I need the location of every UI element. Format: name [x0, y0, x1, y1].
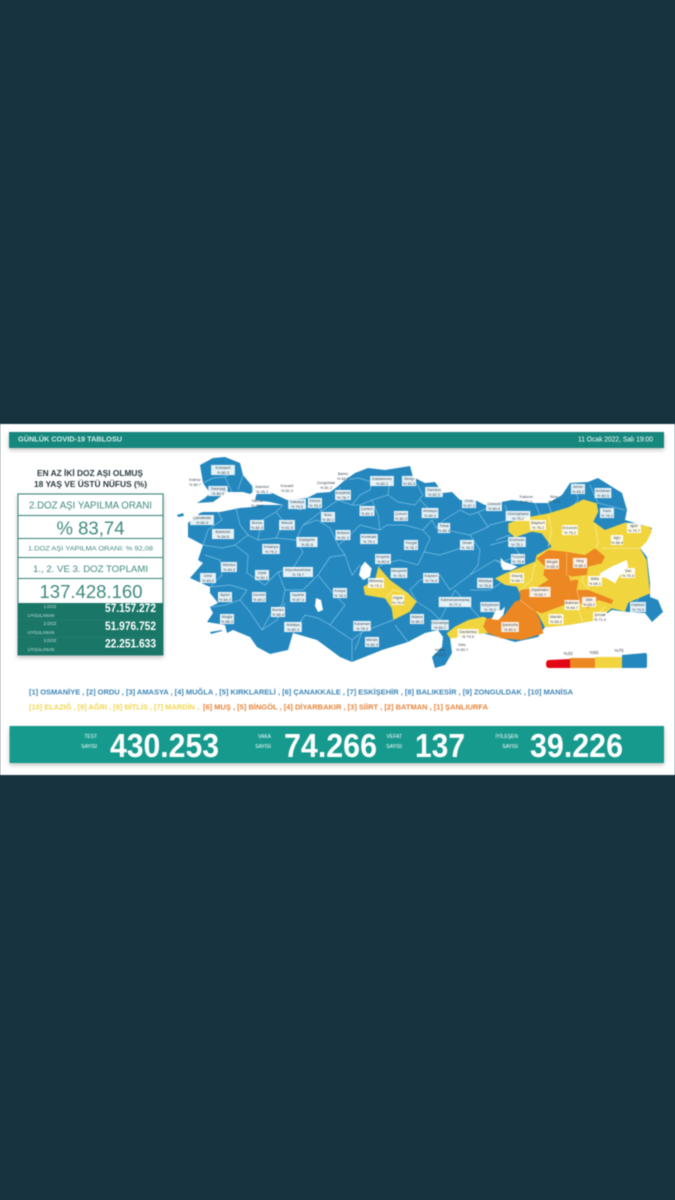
province labels: % 74.4 [392, 600, 405, 605]
dose table: UYGULANAN [28, 630, 54, 635]
province labels: % 80.3 [196, 520, 208, 525]
province labels: Mersin [366, 637, 378, 642]
province labels: % 82.1 [256, 575, 268, 580]
stat: vaka: SAYISI [255, 744, 271, 750]
province labels: Giresun [487, 501, 501, 506]
province labels: % 74.5 [291, 504, 303, 509]
province labels: % 80.2 [424, 513, 436, 518]
yellow province: Gaziantep [447, 617, 488, 638]
province labels: % 87.2 [520, 499, 532, 504]
stat: test: SAYISI [81, 744, 97, 750]
province labels: Samsun [427, 487, 441, 492]
province labels: Adana [411, 614, 423, 619]
province labels: % 78.3 [461, 545, 473, 550]
province labels: % 84.4 [488, 506, 501, 511]
province labels: % 78.3 [334, 593, 346, 598]
province labels: % 60.2 [504, 627, 516, 632]
ranking list: yellow: [10] ELAZIĞ , [9] AĞRI , [8] BİTLİS , [7] MARDİN , [29, 702, 199, 712]
province labels: % 63.7 [534, 592, 546, 597]
province labels: % 68.4 [611, 540, 624, 545]
province labels: % 80.9 [212, 491, 224, 496]
province labels: % 69.7 [456, 647, 468, 652]
map legend [546, 648, 647, 668]
map legend: %65 [589, 650, 599, 655]
province labels: % 82.1 [376, 481, 388, 486]
province labels: Eskişehir [299, 537, 316, 542]
province labels: % 82.9 [428, 492, 440, 497]
province labels: % 78.7 [337, 495, 349, 500]
stat: vaka: VAKA [258, 734, 272, 740]
province labels: % 81.5 [281, 525, 293, 530]
province labels: % 75.1 [511, 542, 523, 547]
province labels: Hatay [435, 647, 445, 652]
left heading: EN AZ İKİ DOZ AŞI OLMUŞ [37, 468, 144, 478]
province labels: Yalova [251, 498, 264, 503]
province labels: % 80.3 [395, 516, 407, 521]
province labels: Denizli [253, 592, 265, 597]
province labels: % 69.2 [550, 619, 562, 624]
lakes and reservoirs [359, 558, 628, 620]
province labels: Kahramanmaraş [441, 597, 469, 602]
header bar: 11 Ocak 2022, Salı 19:00 [578, 436, 653, 444]
first dose rate rows: 1., 2. VE 3. DOZ TOPLAMI [33, 564, 148, 575]
province labels: Trabzon [519, 494, 533, 499]
left heading: 18 YAŞ VE ÜSTÜ NÜFUS (%) [34, 479, 147, 489]
map legend: %33 [563, 651, 573, 656]
dose table: UYGULANAN [28, 647, 54, 652]
province labels: Amasya [423, 508, 438, 513]
province labels: % 75.2 [512, 516, 524, 521]
dose table: 51.976.752 [105, 621, 156, 633]
province labels: Kayseri [425, 573, 438, 578]
province labels: Ankara [337, 530, 350, 535]
province labels: % 80.7 [189, 482, 201, 487]
province labels: Bilecik [281, 520, 293, 525]
province labels: % 83.3 [403, 481, 415, 486]
stat: vefat [386, 727, 465, 764]
province labels: % 71.9 [594, 617, 606, 622]
province labels: Nevşehir [391, 568, 407, 573]
ranking list: orange: [6] MUŞ , [5] BİNGÖL , [4] DİYARBAKIR , [3] SİİRT , [2] BATMAN , [1] ŞANLIURFA [203, 702, 489, 712]
province labels: % 80.3 [251, 525, 263, 530]
province labels: % 77.1 [449, 602, 461, 607]
map legend: %75 [614, 648, 624, 653]
province labels: Batman [565, 600, 579, 605]
province labels: Bursa [252, 520, 263, 525]
province labels: Tokat [439, 523, 450, 528]
province labels: % 84.2 [202, 578, 214, 583]
province labels: Elazığ [512, 573, 522, 578]
first dose rate rows [28, 500, 154, 602]
province labels: % 74.3 [622, 573, 634, 578]
province labels: İstanbul [255, 484, 269, 489]
province labels: Afyonkarahisar [285, 567, 312, 572]
province labels [189, 465, 646, 657]
province labels: Edirne [189, 477, 201, 482]
header bar [9, 432, 664, 448]
ranking list: blue: [1] OSMANİYE , [2] ORDU , [3] AMASYA , [4] MUĞLA , [5] KIRKLARELİ , [6] ÇANAKKALE , [7] ESKİŞEHİR , [8] BALIKESİR , [9] ZONGULDAK , [10] MANİSA [29, 688, 574, 696]
coloured regions, lakes (reference-crop coordinates) [359, 499, 652, 640]
province labels: Rize [550, 494, 558, 499]
province labels: Adıyaman [481, 602, 499, 607]
province labels: Çankırı [361, 506, 373, 511]
province labels: % 79.2 [265, 549, 277, 554]
province labels: % 69.1 [589, 581, 601, 586]
dose table [18, 603, 163, 655]
province labels: % 81.1 [361, 511, 373, 516]
left heading [34, 468, 147, 489]
province labels: Malatya [478, 578, 493, 583]
stat: vefat: 137 [415, 727, 465, 764]
province labels: Ağrı [613, 535, 621, 540]
province labels: % 84.2 [219, 597, 231, 602]
province labels: % 75.8 [479, 583, 491, 588]
province labels: Muş [576, 558, 584, 563]
province labels: Bayburt [531, 520, 546, 525]
province labels: Düzce [309, 498, 321, 503]
map of Turkey [177, 457, 663, 668]
province labels: % 76.2 [601, 513, 613, 518]
dose table: 22.251.633 [105, 638, 156, 650]
province labels: % 76.2 [484, 607, 496, 612]
province labels: Sakarya [290, 499, 305, 504]
stat: iyileşen: 39.226 [530, 727, 623, 764]
province labels: % 84.2 [253, 597, 265, 602]
province labels: % 87.1 [463, 503, 475, 508]
province labels: Hakkari [631, 602, 645, 607]
orange borders [520, 552, 580, 610]
stat: test: TEST [84, 734, 97, 740]
province labels: Kocaeli [281, 483, 294, 488]
dose table: UYGULANAN [28, 613, 54, 618]
province labels: Gaziantep [459, 629, 477, 634]
province labels: % 81.0 [281, 488, 294, 493]
province labels: Şanlıurfa [502, 622, 519, 627]
province labels: Kars [603, 508, 611, 513]
province labels: Sivas [462, 540, 472, 545]
province labels: % 79.1 [363, 539, 375, 544]
stat: vefat: VEFAT [387, 734, 402, 740]
Beyşehir lake [315, 598, 323, 612]
province labels: Balıkesir [216, 529, 231, 534]
province labels: % 80.3 [438, 528, 450, 533]
province labels: Sinop [404, 476, 414, 481]
province labels: % 84.3 [223, 567, 235, 572]
province labels: % 84.6 [217, 534, 229, 539]
province labels: Bitlis [591, 576, 599, 581]
province labels: Gümüşhane [507, 511, 529, 516]
province labels: Niğde [393, 595, 403, 600]
province labels: Aksaray [369, 578, 383, 583]
province labels: % 81.3 [337, 535, 349, 540]
province labels: Ardahan [596, 488, 610, 493]
province labels: Osmaniye [431, 620, 449, 625]
province labels: % 75.4 [548, 499, 561, 504]
stat: iyileşen: SAYISI [502, 744, 518, 750]
province labels: Karaman [354, 621, 370, 626]
province labels: % 64.7 [566, 605, 578, 610]
province labels: Konya [334, 588, 346, 593]
province labels: Manisa [223, 562, 236, 567]
province labels: Aydın [220, 592, 230, 597]
province labels: Artvin [573, 484, 583, 489]
province labels: Iğdır [630, 523, 639, 528]
province labels: % 80.8 [377, 559, 389, 564]
province labels: Yozgat [405, 540, 418, 545]
province labels: Çanakkale [193, 515, 211, 520]
first dose rate rows: 1.DOZ AŞI YAPILMA ORANI: % 92,08 [28, 546, 154, 552]
province labels: Kırşehir [376, 554, 390, 559]
province labels: % 84.5 [337, 476, 349, 481]
dose table: 3.DOZ [44, 638, 57, 643]
province labels: % 86.4 [272, 612, 285, 617]
province labels: % 86.3 [221, 619, 233, 624]
province labels: % 74.9 [632, 607, 644, 612]
first dose rate rows: 2.DOZ AŞI YAPILMA ORANI [29, 500, 152, 512]
province labels: Kütahya [264, 544, 279, 549]
province labels: % 70.7 [628, 528, 640, 533]
province labels: % 78.2 [309, 503, 321, 508]
province labels: % 81.2 [320, 485, 332, 490]
white panel [0, 424, 675, 775]
province labels: % 79.8 [512, 559, 524, 564]
province labels: Erzurum [563, 525, 577, 530]
province labels: Zonguldak [317, 480, 335, 485]
province labels: % 78.7 [292, 572, 304, 577]
province labels: % 76.9 [251, 503, 263, 508]
province labels: Ordu [465, 498, 473, 503]
dose table: 1.DOZ [44, 604, 57, 609]
province labels: Kırıkkale [361, 534, 377, 539]
province labels: % 81.8 [301, 542, 313, 547]
province labels: Bartın [338, 471, 348, 476]
province labels: % 80.1 [322, 517, 334, 522]
province labels: % 80.2 [411, 619, 423, 624]
province labels: % 87.3 [292, 597, 304, 602]
province labels: Erzincan [509, 537, 525, 542]
province labels: Karabük [336, 490, 350, 495]
province labels: % 80.3 [366, 642, 378, 647]
yellow province group: Aksaray, Niğde [363, 567, 417, 620]
first dose rate rows: 137.428.160 [40, 581, 142, 602]
province labels: % 83.2 [434, 652, 446, 657]
province labels: % 80.3 [287, 627, 299, 632]
blue provinces base [177, 457, 663, 668]
province labels: % 73.1 [370, 583, 382, 588]
dose table: 57.157.272 [105, 603, 156, 615]
province labels: % 74.4 [425, 578, 438, 583]
stat: iyileşen: İYİLEŞEN [495, 733, 518, 740]
province labels: Tekirdağ [211, 486, 225, 491]
province labels: Kilis [458, 642, 466, 647]
blue province borders [203, 470, 640, 662]
province labels: Kırklareli [215, 465, 231, 470]
province labels: İzmir [204, 573, 213, 578]
province labels: Bolu [324, 512, 332, 517]
province labels: Siirt [586, 597, 593, 602]
province labels: Van [625, 568, 631, 573]
province labels: % 84.7 [434, 625, 446, 630]
province labels: Antalya [287, 622, 300, 627]
province labels: Tunceli [512, 554, 524, 559]
province labels: % 78.7 [405, 545, 417, 550]
province labels: Isparta [292, 592, 305, 597]
province labels: % 78.0 [393, 573, 406, 578]
province labels: Çorum [395, 511, 407, 516]
province labels: % 76.7 [256, 489, 268, 494]
province labels: % 83.2 [572, 489, 584, 494]
stat: vaka: 74.266 [284, 727, 377, 764]
province labels: Diyarbakır [531, 587, 550, 592]
first dose rate rows: % 83,74 [56, 518, 124, 538]
orange provinces [483, 548, 613, 640]
stat: vefat: SAYISI [386, 744, 402, 750]
stat: iyileşen [495, 727, 623, 764]
province labels: % 80.3 [217, 470, 229, 475]
vaccination panel [18, 494, 163, 655]
dose table: 2.DOZ [44, 621, 57, 626]
header bar: GÜNLÜK COVID-19 TABLOSU [18, 434, 122, 444]
yellow province group: east [495, 499, 652, 627]
bottom statistics bar [10, 726, 664, 764]
province labels: Mardin [550, 614, 562, 619]
province labels: Kastamonu [372, 476, 392, 481]
province labels: % 69.7 [511, 578, 523, 583]
province labels: % 65.3 [546, 564, 558, 569]
province labels: % 75.2 [564, 530, 576, 535]
province labels: Burdur [272, 607, 285, 612]
province labels: % 82.5 [597, 493, 609, 498]
province labels: Muğla [222, 614, 233, 619]
province labels: Uşak [258, 570, 266, 575]
stat: test: 430.253 [110, 727, 219, 764]
province labels: % 63.2 [583, 602, 595, 607]
province labels: % 75.2 [532, 525, 544, 530]
province labels: % 74.9 [462, 634, 474, 639]
province labels: % 78.3 [356, 626, 368, 631]
province labels: % 66.1 [574, 563, 586, 568]
province labels: Bingöl [547, 559, 558, 564]
province labels: Şırnak [594, 612, 606, 617]
